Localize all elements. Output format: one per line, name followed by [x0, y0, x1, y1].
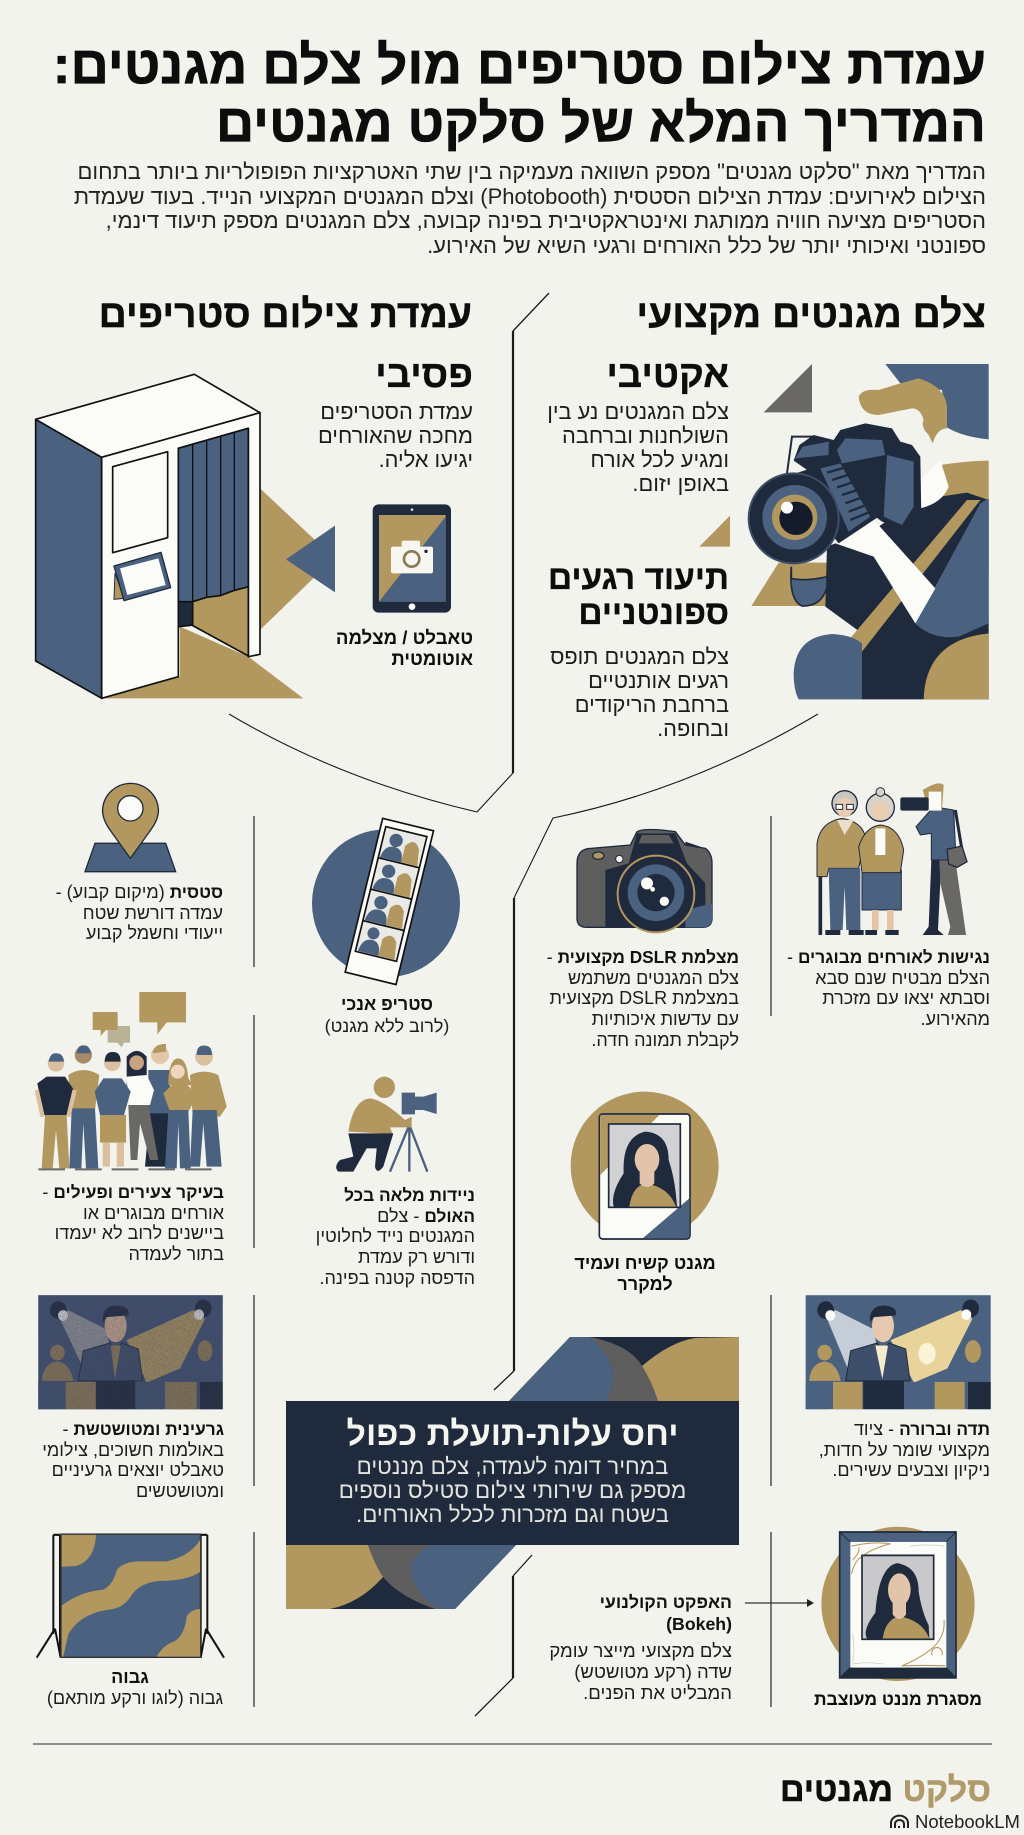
footer rule: [33, 1743, 992, 1745]
panel: cost-benefit callout: [286, 1337, 739, 1609]
text: grainy and blurry: [42, 1419, 224, 1501]
text: full mobility: המגנטים נייד לחלוטין: [316, 1226, 475, 1246]
icon: photo strip: [312, 817, 460, 986]
label: designed magnet frame: מסגרת מננט מעוצבת: [814, 1689, 982, 1709]
text: bokeh effect: האפקט הקולנועי: [600, 1592, 732, 1612]
text: passive: [318, 399, 473, 472]
person 3: [95, 1052, 131, 1167]
text: passive: יגיעו אליה.: [379, 447, 473, 472]
panel text: [339, 1454, 686, 1527]
text: full mobility: ניידות מלאה בכל: [344, 1185, 475, 1205]
icon: designed magnet frame: [821, 1526, 975, 1681]
icon: kneeling mobile photographer: [336, 1076, 437, 1172]
text: static location: ייעודי וחשמל קבוע: [86, 923, 223, 943]
text: active: השולחנות וברחבה: [562, 423, 729, 448]
text: sharp and clear: תדה וברורה - ציוד: [854, 1419, 990, 1439]
text: professional DSLR camera: מצלמת DSLR מקצועית -: [547, 947, 739, 967]
panel text: במחיר דומה לעמדה, צלם מננטים: [357, 1454, 668, 1479]
text: bokeh effect: [549, 1592, 732, 1703]
panel decoration: [286, 1337, 739, 1609]
icon: DSLR camera: [576, 828, 713, 934]
panel: spontaneous moments: [548, 560, 729, 741]
person 2: [68, 1045, 99, 1168]
text: high price: גבוה: [111, 1667, 149, 1687]
text: mostly young and active: בעיקר צעירים ופעילים -: [42, 1182, 224, 1202]
label: vertical strip: [325, 994, 449, 1036]
text: bokeh effect: צלם מקצועי מייצר עומק: [549, 1640, 732, 1661]
text: professional DSLR camera: עם עדשות איכותיות: [592, 1009, 739, 1029]
text: static location: סטסית (מיקום קבוע) -: [56, 882, 223, 902]
text: spontaneous: צלם המגנטים תופס: [550, 644, 729, 669]
label: tablet / automatic camera: אוטומטית: [391, 648, 473, 669]
panel: active: [547, 354, 729, 496]
intro paragraph: ספונטני ואיכותי יותר של כלל האורחים ורגעי השיא של האירוע.: [427, 233, 986, 258]
heading: spontaneous: תיעוד רגעים: [548, 560, 729, 597]
heading: active: אקטיבי: [606, 354, 729, 396]
text: mostly young and active: בתור לעמדה: [128, 1244, 224, 1264]
icon: grainy tablet event photo: [38, 1295, 223, 1410]
title: [53, 36, 986, 153]
text: accessibility for older guests: [787, 947, 990, 1029]
label: tablet / automatic camera: [336, 627, 473, 669]
text: mostly young and active: אורחים מבוגרים או: [83, 1203, 224, 1223]
icon: photographer with camera: [699, 364, 989, 700]
icon: rigid magnet photo: [570, 1092, 719, 1240]
text: high price: [47, 1667, 223, 1708]
label: vertical strip: סטריפ אנכי: [341, 994, 433, 1014]
text: active: צלם המגנטים נע בין: [547, 399, 729, 424]
text: full mobility: [316, 1185, 475, 1288]
text: sharp and clear: מקצועי שומר על חדות,: [819, 1440, 990, 1460]
text: spontaneous: ובחופה.: [657, 716, 729, 741]
text: grainy and blurry: ומטושטשים: [136, 1481, 224, 1501]
icon: backdrop on stands: [36, 1533, 225, 1658]
heading: strip photo booth: עמדת צילום סטריפים: [99, 293, 472, 336]
intro paragraph: הצילום לאירועים: עמדת הצילום הסטסית (Photobooth) וצלם המגנטים המקצועי הנייד. בעוד שעמדת: [74, 184, 986, 209]
intro paragraph: הסטריפים מציעה חוויה ממותגת ואינטראקטיבית בפינה קבועה, צלם המגנטים מספק תיעוד דינמי,: [106, 208, 986, 233]
text: professional DSLR camera: במצלמת DSLR מקצועית: [550, 988, 739, 1008]
label: vertical strip: (לרוב ללא מגנט): [325, 1016, 449, 1036]
person 6: [163, 1058, 197, 1168]
heading: professional magnet photographer: צלם מגנטים מקצועי: [636, 293, 986, 336]
text: full mobility: ודורש רק עמדת: [358, 1247, 475, 1267]
text: static location: עמדה דורשת שטח: [83, 903, 223, 923]
heading: passive: פסיבי: [375, 354, 473, 396]
text: spontaneous: רגעים אותנטיים: [588, 668, 729, 693]
icon: NotebookLM: [889, 1814, 910, 1829]
text: passive: עמדת הסטריפים: [320, 399, 473, 424]
person 5: [145, 1044, 170, 1167]
text: accessibility for older guests: נגישות לאורחים מבוגרים -: [787, 947, 990, 967]
heading: spontaneous: ספונטניים: [578, 595, 729, 632]
arrow: bokeh to framed magnet: [745, 1599, 814, 1607]
text: spontaneous: [550, 644, 729, 741]
icon: photographer with elderly couple: [816, 783, 968, 935]
text: accessibility for older guests: וסבתא יצאו עם מזכרת: [822, 988, 990, 1008]
text: mostly young and active: [42, 1182, 224, 1264]
text: professional DSLR camera: צלם המגנטים משתמש: [568, 968, 739, 988]
text: grainy and blurry: טאבלט יוצאים גרעיניים: [52, 1460, 224, 1480]
label: rigid durable magnet: למקרר: [617, 1274, 673, 1294]
text: professional DSLR camera: לקבלת תמונה חדה.: [591, 1030, 739, 1050]
text: accessibility for older guests: הצלם מבטיח שנם סבא: [815, 968, 990, 988]
label: rigid durable magnet: מגנט קשיח ועמיד: [574, 1253, 716, 1273]
panel heading: יחס עלות-תועלת כפול: [346, 1415, 678, 1453]
person 4: [126, 1051, 158, 1160]
text: full mobility: האולם - צלם: [377, 1206, 475, 1226]
panel dark box: [286, 1401, 739, 1545]
text: sharp and clear: ניקיון וצבעים עשירים.: [832, 1460, 990, 1480]
icon: location pin: [84, 782, 177, 872]
intro paragraph: המדריך מאת "סלקט מגנטים" מספק השוואה מעמיקה בין שתי האטרקציות הפופולריות ביותר בתחום: [77, 159, 986, 184]
text: spontaneous: ברחבת הריקודים: [575, 692, 729, 717]
panel text: מספק גם שירותי צילום סטילס נוספים: [339, 1478, 686, 1503]
text: sharp and clear: [819, 1419, 990, 1480]
text: professional DSLR camera: [547, 947, 739, 1050]
text: bokeh effect: (Bokeh): [666, 1614, 732, 1634]
text: active: באופן יזום.: [632, 471, 729, 496]
icon: clear event photo: [806, 1295, 991, 1410]
label: rigid durable magnet: [574, 1253, 716, 1294]
text: full mobility: הדפסה קטנה בפינה.: [320, 1268, 475, 1288]
label: tablet / automatic camera: טאבלט / מצלמה: [336, 627, 473, 648]
title: עמדת צילום סטריפים מול צלם מגנטים:: [53, 36, 986, 95]
panel text: בשטח וגם מזכרות לכלל האורחים.: [356, 1502, 669, 1527]
title: המדריך המלא של סלקט מגנטים: [216, 94, 986, 153]
intro paragraph: [74, 159, 986, 258]
text: grainy and blurry: באולמות חשוכים, צילומי: [42, 1440, 224, 1460]
text: mostly young and active: ביישנים לרוב לא יעמדו: [55, 1223, 224, 1243]
text: high price: גבוה (לוגו ורקע מותאם): [47, 1688, 223, 1708]
text: passive: מחכה שהאורחים: [318, 423, 473, 448]
icon: crowd of young guests: [34, 992, 227, 1170]
text: grainy and blurry: גרעינית ומטושטשת -: [62, 1419, 224, 1439]
text: bokeh effect: שדה (רקע מטושטש): [574, 1661, 732, 1682]
brand logo: סלקט מגנטים: [780, 1771, 991, 1809]
text: accessibility for older guests: מהאירוע.: [920, 1009, 990, 1029]
text: active: [547, 399, 729, 496]
NotebookLM credit: [890, 1811, 1020, 1832]
person 1: [37, 1053, 75, 1168]
heading: spontaneous: [548, 560, 729, 632]
icon: photo booth with tablet: [34, 374, 451, 700]
text: NotebookLM: NotebookLM: [915, 1811, 1020, 1832]
panel: passive: [318, 354, 473, 472]
text: bokeh effect: המבליט את הפנים.: [583, 1682, 732, 1703]
person 7: [190, 1046, 227, 1167]
text: static location: [56, 882, 223, 943]
text: active: ומגיע לכל אורח: [590, 447, 729, 472]
